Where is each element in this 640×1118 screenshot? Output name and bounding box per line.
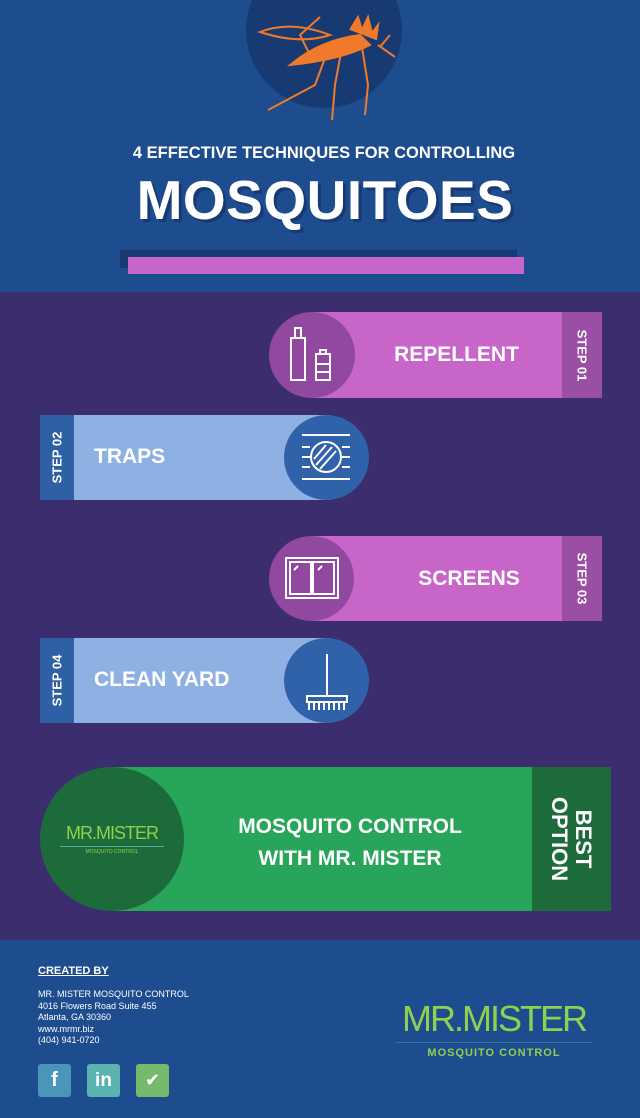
step 03: screens: STEP 03 [575, 553, 590, 604]
footer: MR. MISTER MOSQUITO CONTROL [38, 989, 189, 999]
icon: rake [306, 654, 348, 710]
step 04: clean yard [40, 638, 369, 723]
subtitle: 4 EFFECTIVE TECHNIQUES FOR CONTROLLING [133, 144, 515, 162]
created by text: CREATED BY [38, 965, 109, 977]
best option panel: WITH MR. MISTER [258, 847, 442, 870]
header panel [0, 0, 640, 292]
footer [0, 940, 640, 1118]
step 01: repellent [269, 312, 602, 398]
icon: trap [302, 434, 350, 480]
footer: Atlanta, GA 30360 [38, 1012, 111, 1022]
icon: bottles [290, 327, 331, 381]
step 03: screens [269, 536, 602, 621]
best option panel: MOSQUITO CONTROL [238, 815, 462, 838]
logo small: MOSQUITO CONTROL [86, 849, 138, 855]
social icons [38, 1064, 169, 1097]
logo [396, 998, 592, 1059]
icon: mosquito [246, 0, 402, 108]
icon: window [285, 557, 339, 599]
step 01: repellent: REPELLENT [394, 343, 519, 366]
footer: 4016 Flowers Road Suite 455 [38, 1000, 157, 1010]
logo small: MR.MISTER [66, 823, 158, 843]
step 01: repellent: STEP 01 [575, 329, 590, 381]
step 02: traps: STEP 02 [50, 432, 65, 483]
footer: (404) 941-0720 [38, 1035, 100, 1045]
best option panel: OPTION [548, 797, 572, 881]
best option panel: BEST [572, 810, 596, 868]
step 04: clean yard: CLEAN YARD [94, 668, 229, 691]
social icons: f [51, 1069, 58, 1091]
social icons: ✔ [145, 1070, 160, 1090]
logo: MR.MISTER [402, 998, 586, 1039]
step 02: traps: TRAPS [94, 445, 165, 468]
decorative bar [120, 250, 517, 268]
step 03: screens: SCREENS [418, 567, 520, 590]
title: MOSQUITOES [137, 169, 513, 231]
step 02: traps [40, 415, 369, 500]
step 04: clean yard: STEP 04 [50, 655, 65, 706]
logo: MOSQUITO CONTROL [427, 1047, 561, 1059]
footer: www.mrmr.biz [38, 1024, 94, 1034]
social icons: in [95, 1070, 112, 1091]
best option panel [40, 767, 611, 911]
logo small [60, 823, 164, 855]
